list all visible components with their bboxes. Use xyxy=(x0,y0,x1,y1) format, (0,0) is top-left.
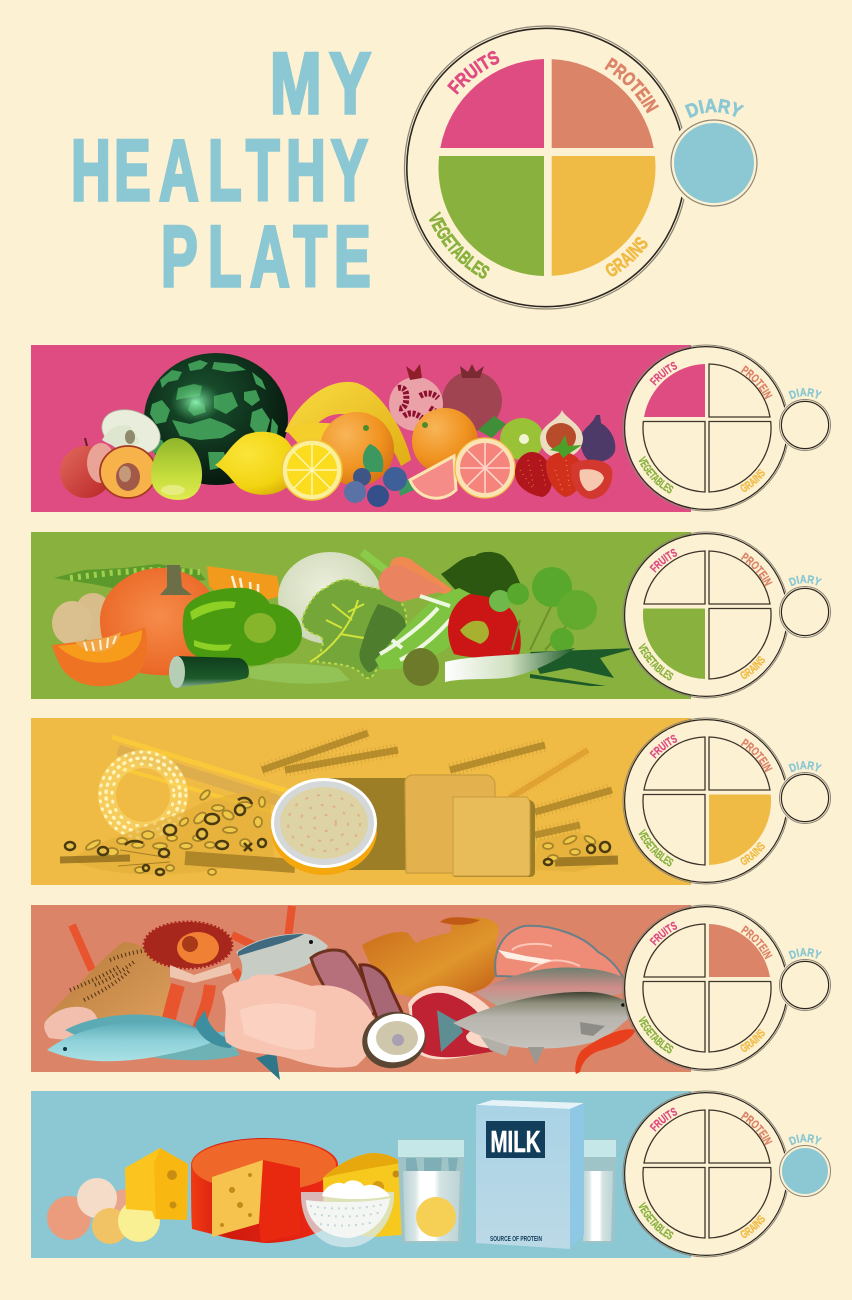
quadrant: grains xyxy=(552,156,656,276)
chard xyxy=(441,552,527,602)
rainbow trout xyxy=(476,967,635,1008)
plate: vegetables highlighted: FRUITS xyxy=(649,548,678,573)
plate: vegetables highlighted xyxy=(622,532,831,698)
asparagus xyxy=(54,564,206,590)
title: HEALTHY xyxy=(71,124,368,219)
crab legs back xyxy=(72,906,292,1010)
cheese block xyxy=(125,1148,188,1220)
plate: protein highlighted: VEGETABLES xyxy=(638,1016,674,1054)
plate: protein highlighted: GRAINS xyxy=(740,1029,766,1052)
plate: grains highlighted: VEGETABLES xyxy=(638,828,674,866)
lemon xyxy=(215,432,296,495)
orange left xyxy=(320,412,394,486)
plate: fruits highlighted xyxy=(622,344,831,512)
apple slice xyxy=(96,402,166,462)
label: protein: PROTEIN xyxy=(604,57,659,114)
fruits illustration xyxy=(60,353,615,507)
salmon steak xyxy=(495,926,624,980)
pumpkin slice xyxy=(52,627,147,686)
vegetables illustration xyxy=(52,552,636,688)
plate: grains highlighted: GRAINS xyxy=(740,842,766,865)
cheese wheel xyxy=(191,1138,338,1243)
herb xyxy=(489,567,597,652)
label: grains: GRAINS xyxy=(606,236,648,276)
quadrant: vegetables xyxy=(438,156,544,276)
plate: fruits highlighted: FRUITS xyxy=(649,362,678,386)
plate: grains highlighted: FRUITS xyxy=(649,734,678,759)
title: PLATE xyxy=(161,210,371,305)
pear xyxy=(151,438,202,500)
grapefruit slice xyxy=(455,438,515,498)
roasted chicken xyxy=(362,917,500,998)
plate: vegetables highlighted: GRAINS xyxy=(740,656,766,679)
quadrant: protein xyxy=(552,59,654,148)
napa cabbage xyxy=(375,588,471,670)
panel: grains band xyxy=(31,718,691,885)
label: vegetables: VEGETABLES xyxy=(428,211,490,279)
plate: dairy highlighted: PROTEIN xyxy=(740,1111,772,1146)
pomegranate cut xyxy=(389,364,443,431)
panel: vegetables band xyxy=(31,532,691,699)
green pepper xyxy=(183,588,302,666)
potatoes xyxy=(52,593,113,645)
grain pile xyxy=(60,789,295,875)
plate: dairy highlighted: FRUITS xyxy=(649,1108,678,1132)
carrots xyxy=(362,552,452,602)
title xyxy=(71,35,371,305)
plate: protein highlighted: FRUITS xyxy=(649,922,678,946)
text: source of protein: SOURCE OF PROTEIN xyxy=(490,1234,542,1243)
cheese wedge xyxy=(323,1153,402,1237)
plate: grains highlighted: PROTEIN xyxy=(740,738,772,772)
raw meat xyxy=(408,986,508,1059)
plate: dairy highlighted: DIARY xyxy=(788,1134,822,1146)
plate: fruits highlighted: PROTEIN xyxy=(740,365,772,400)
fig cut xyxy=(540,410,583,458)
bread loaf xyxy=(330,775,535,877)
plate: fruits highlighted: VEGETABLES xyxy=(638,456,674,494)
red apple xyxy=(60,438,115,498)
label: diary: DIARY xyxy=(684,98,744,118)
plate: dairy highlighted: GRAINS xyxy=(740,1215,766,1238)
plate: protein highlighted: DIARY xyxy=(788,948,822,960)
plate: dairy highlighted: VEGETABLES xyxy=(638,1202,674,1240)
diary cup xyxy=(670,98,758,207)
plate: vegetables highlighted: PROTEIN xyxy=(740,552,772,586)
panel: fruits band xyxy=(31,345,691,512)
red pepper xyxy=(448,594,521,658)
fish tail overflow xyxy=(256,1052,280,1080)
big grey fish xyxy=(437,992,640,1065)
oyster xyxy=(356,1005,432,1075)
wheat ear in pile xyxy=(60,850,295,866)
lemon slice xyxy=(282,440,342,500)
grapefruit wedge xyxy=(410,456,456,498)
kale xyxy=(302,579,406,678)
plate: dairy highlighted xyxy=(622,1090,831,1258)
text: milk: MILK xyxy=(490,1124,541,1159)
pumpkin wedge back xyxy=(207,566,281,604)
eggs xyxy=(47,1178,160,1244)
cabbage xyxy=(278,552,382,644)
blueberries xyxy=(344,444,420,507)
cottage cheese bowl xyxy=(301,1180,394,1247)
quadrant: fruits xyxy=(440,59,544,148)
banana xyxy=(285,382,411,466)
ham loaf xyxy=(44,942,170,1040)
protein illustration xyxy=(44,906,640,1080)
kiwi xyxy=(478,416,544,460)
bowl xyxy=(271,778,377,875)
main plate diagram xyxy=(404,25,758,310)
strawberries xyxy=(515,435,612,499)
glass left xyxy=(397,1139,465,1243)
plate: fruits highlighted: DIARY xyxy=(788,388,822,400)
orange right xyxy=(412,408,478,474)
beans xyxy=(248,663,350,684)
grains illustration xyxy=(60,733,618,877)
plate: vegetables highlighted: VEGETABLES xyxy=(638,642,674,680)
milk carton xyxy=(476,1100,584,1249)
small silver fish xyxy=(236,934,328,982)
green onion xyxy=(445,648,636,686)
panel: protein band xyxy=(31,905,691,1072)
raw chicken xyxy=(222,974,376,1068)
plate: protein highlighted: PROTEIN xyxy=(740,925,772,960)
wheat ears xyxy=(262,733,612,835)
plate: grains highlighted: DIARY xyxy=(788,760,822,772)
label: fruits: FRUITS xyxy=(447,50,500,95)
glass right xyxy=(583,1139,617,1243)
fig purple xyxy=(580,415,615,462)
plate: fruits highlighted: GRAINS xyxy=(740,469,766,492)
right grain pile xyxy=(532,832,618,872)
liver xyxy=(311,950,404,1032)
blue fish back xyxy=(140,1034,240,1060)
title: MY xyxy=(270,35,371,131)
crab xyxy=(144,922,232,1029)
pumpkin xyxy=(100,565,219,675)
plate: protein highlighted xyxy=(622,904,831,1072)
spaghetti sticks xyxy=(112,737,290,812)
plate: grains highlighted xyxy=(622,718,831,884)
shrimp xyxy=(575,1029,636,1074)
panel: dairy band xyxy=(31,1091,691,1258)
cucumber xyxy=(169,656,249,688)
watermelon xyxy=(144,353,288,485)
blue fish front xyxy=(47,1010,233,1061)
plate: vegetables highlighted: DIARY xyxy=(788,574,822,586)
couscous ring xyxy=(100,752,186,838)
cut peach xyxy=(100,446,156,498)
dairy illustration xyxy=(47,1100,617,1249)
artichoke xyxy=(403,648,439,686)
pomegranate dark xyxy=(442,364,502,431)
